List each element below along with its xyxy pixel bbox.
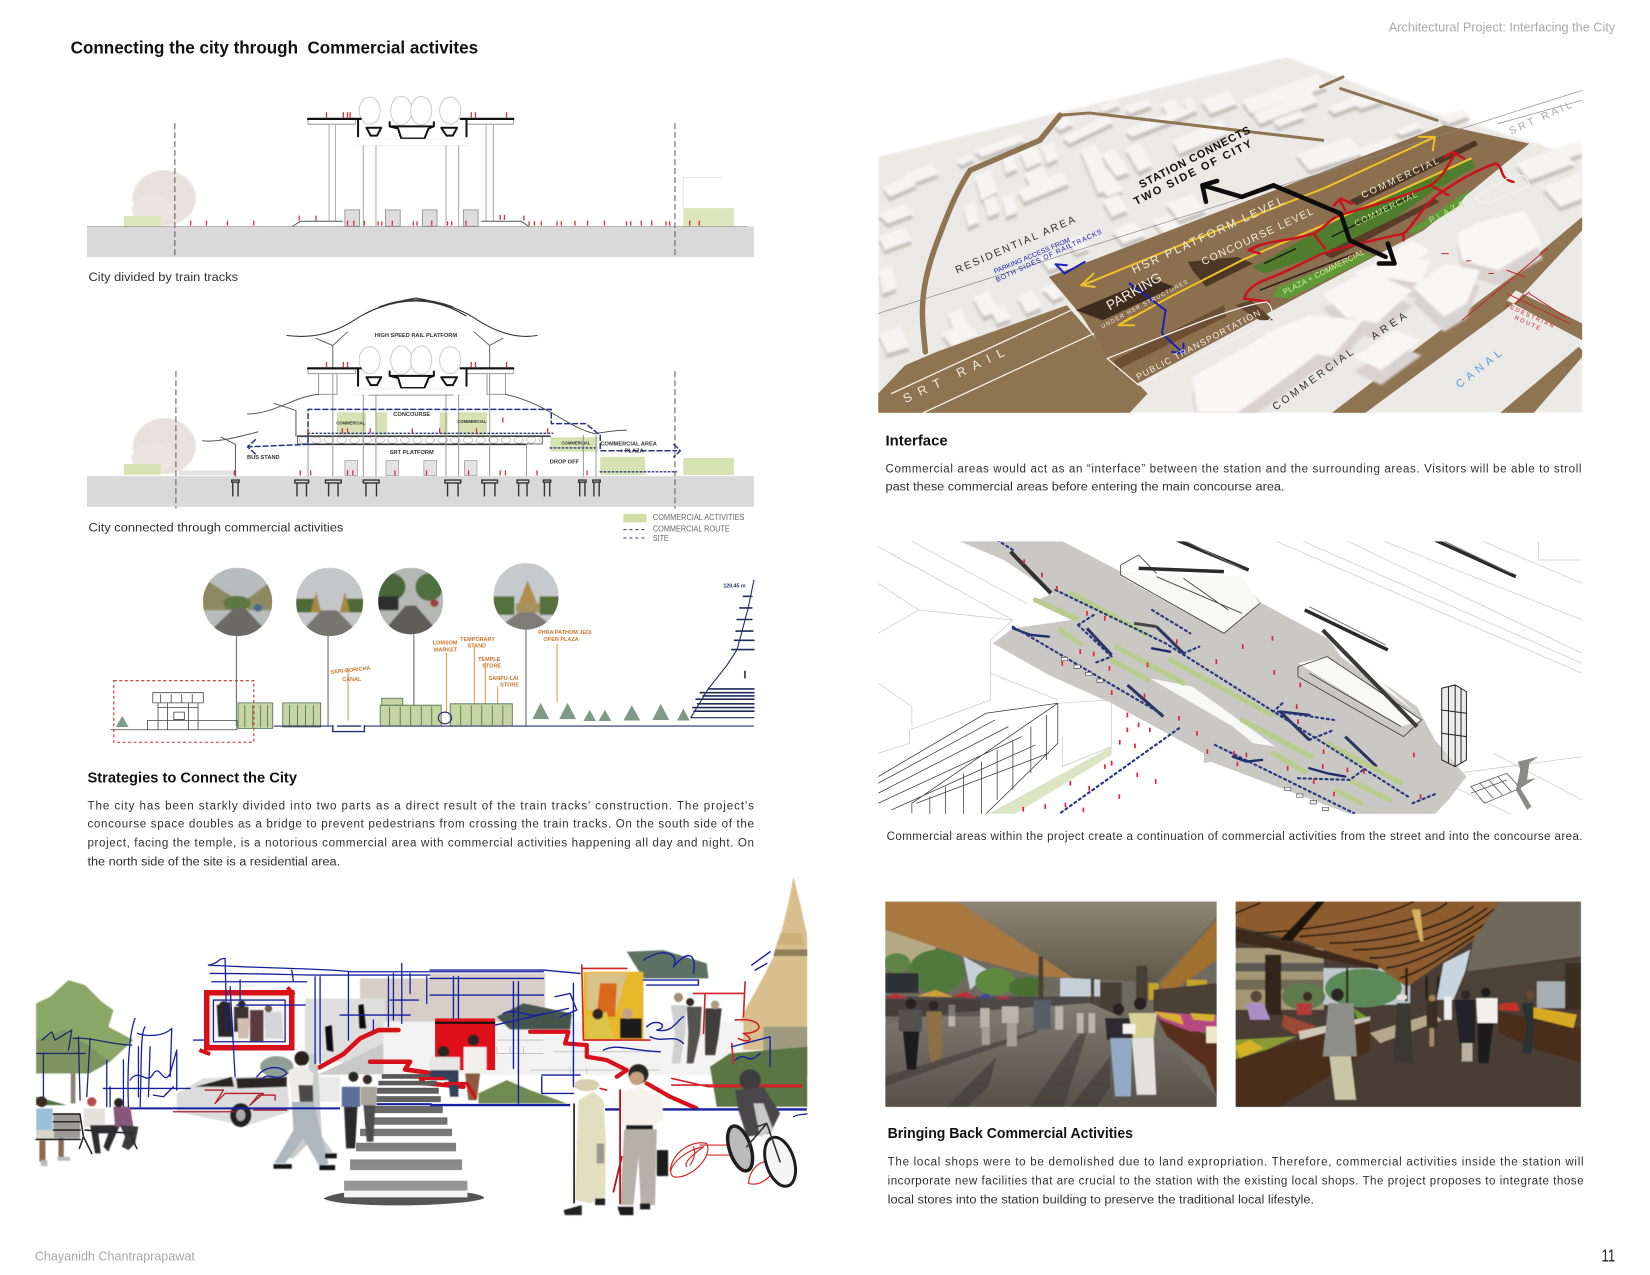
model photo with annotations (878, 57, 1582, 428)
sketch notes: CANAL (342, 677, 362, 683)
red bars on seated pair (420, 1078, 475, 1097)
section labels: COMMERCIAL (562, 440, 591, 445)
rail lines (878, 90, 1582, 314)
model annotations: PARKING ACCESS FROM (993, 237, 1072, 276)
pedestrians (191, 112, 699, 226)
red stairs upper (319, 1030, 463, 1087)
seated people on bench (36, 1096, 138, 1166)
urban street elevation with photo circles (111, 563, 754, 742)
location posts (236, 630, 526, 726)
section labels: + PLAZA (620, 449, 644, 455)
black arrow (1202, 181, 1395, 264)
model annotations: HSR PLATFORM LEVEL (1130, 195, 1287, 276)
model annotations: PLAZA (1427, 198, 1466, 225)
sketch notes (330, 583, 746, 688)
blue arrows (1056, 262, 1184, 354)
car scribble (173, 1090, 287, 1112)
text: interface (886, 464, 1581, 494)
section labels: HIGH SPEED RAIL PLATFORM (375, 333, 457, 339)
customer in grey jacket (1323, 1003, 1357, 1056)
model annotations: PEDESTRIAN (1504, 303, 1554, 330)
model annotations: AREA (1369, 310, 1409, 343)
model annotations: COMMERCIAL (1270, 346, 1356, 413)
photo circle 1 (203, 568, 273, 638)
text: bringing back (888, 1157, 1584, 1206)
red block (435, 1018, 495, 1070)
vendors (1246, 1003, 1270, 1020)
background (885, 901, 1217, 1107)
site boundary dashed (114, 681, 254, 742)
rail band (878, 305, 1148, 413)
model annotations: CANAL (1454, 348, 1504, 391)
title: Connecting the city through Commercial activites (71, 38, 478, 58)
distant figures (1426, 1001, 1437, 1028)
blue sketch lines (103, 958, 543, 1107)
residential blocks (878, 74, 1582, 358)
render: canopy market interior (1235, 901, 1581, 1107)
model annotations: CONCOURSE LEVEL (1200, 205, 1316, 268)
kiosk (1033, 1000, 1051, 1030)
heading: bringing back: Bringing Back Commercial Activities (888, 1126, 1133, 1142)
model annotations: SRT RAIL (901, 346, 1007, 406)
tree (36, 980, 133, 1105)
site model (878, 57, 1582, 428)
legend (623, 513, 744, 543)
text: interface: Commercial areas would act as an “interface” between the station and the surrounding areas. Visitors will be able to stroll (886, 464, 1581, 476)
model annotations: RESIDENTIAL AREA (954, 214, 1077, 276)
text: strategies (87, 801, 754, 868)
text: bringing back: incorporate new facilities that are crucial to the station with the existing local shops. The project proposes to integrate those (888, 1175, 1584, 1187)
tower (1442, 685, 1466, 767)
section labels: COMMERCIAL (457, 419, 487, 424)
sketch notes: TEMPORARY (460, 637, 495, 643)
model annotations: STATION CONNECTS (1137, 125, 1253, 191)
green commercial strips (1035, 593, 1401, 803)
sketch notes: SANPU-LAI (489, 676, 519, 682)
black silhouettes (325, 1004, 366, 1052)
red sketch (530, 1032, 697, 1108)
foreground left couple (899, 1010, 922, 1031)
mini station sketch (111, 693, 237, 730)
sketch notes: LOMSOM (433, 640, 458, 646)
right half of collage (418, 949, 808, 1216)
sketch notes: SERI-BORICHA (330, 666, 371, 676)
canal and ground line (333, 725, 364, 732)
white outlines (892, 175, 1529, 413)
umbrellas (885, 990, 1012, 999)
stairs (323, 1074, 484, 1205)
roads (922, 77, 1582, 413)
yellow circulation arrows (1081, 137, 1471, 325)
walking men (273, 1051, 337, 1170)
lit floor (1370, 1013, 1442, 1043)
woman in cream dress (563, 1079, 606, 1215)
text: strategies: concourse space doubles as a bridge to prevent pedestrians from crossing the train tracks. On the south side of the (87, 819, 754, 831)
text: bringing back: local stores into the station building to preserve the traditional local lifestyle. (888, 1194, 1314, 1206)
green commercial blocks (238, 698, 512, 728)
columns (1038, 956, 1147, 1016)
text: interface: past these commercial areas before entering the main concourse area. (886, 482, 1285, 494)
plants (478, 950, 807, 1107)
legend: COMMERCIAL ROUTE (653, 525, 730, 534)
plant behind car (260, 1056, 293, 1077)
car (177, 1075, 289, 1127)
spire red and blue tail (793, 1113, 807, 1117)
site dashed lines (176, 371, 675, 509)
blue sketch lines left (37, 1030, 132, 1100)
voids (1121, 572, 1422, 747)
cyclist (723, 1069, 801, 1190)
site dashed lines (175, 123, 675, 257)
tree (132, 418, 196, 474)
sketch notes: TEMPLE (478, 657, 501, 663)
station platform (1049, 125, 1529, 385)
back buildings and trees (1235, 948, 1324, 1010)
wall sketches (305, 978, 743, 1102)
sketch notes: STAND (468, 644, 486, 650)
sketch notes: OPEN PLAZA (543, 637, 579, 643)
caption: connected: City connected through commercial activities (89, 523, 344, 535)
back wall marks (497, 1040, 660, 1073)
left counter (1235, 1020, 1370, 1107)
section labels (247, 333, 657, 465)
model annotations: UNDER HSR STRUCTURES (1101, 279, 1189, 330)
right counter (1498, 1011, 1581, 1062)
legend: SITE (653, 534, 669, 543)
floor (1235, 901, 1581, 1107)
commercial route dotted (997, 540, 1437, 813)
legend: COMMERCIAL ACTIVITIES (653, 513, 744, 522)
seated pair (430, 1035, 487, 1100)
tree (132, 170, 196, 226)
model annotations: TWO SIDE OF CITY (1132, 138, 1254, 208)
collage: street life at the station (36, 870, 827, 1230)
photo circle 2 (296, 568, 363, 638)
red frame and diners (199, 987, 294, 1054)
text: strategies: The city has been starkly divided into two parts as a direct result of the train tracks' construction. The project's (87, 801, 754, 813)
text: bringing back: The local shops were to be demolished due to land expropriation. Therefore, commercial activities inside the station will (888, 1157, 1584, 1169)
deck and troughs (308, 346, 513, 395)
side roofs (203, 394, 627, 476)
roof (287, 298, 537, 336)
render: market under station canopy (884, 901, 1217, 1107)
photo circle 3 (376, 568, 443, 638)
caption: commercial areas: Commercial areas within the project create a continuation of commercial activities from the street and into the concourse area. (887, 831, 1583, 843)
walking pair (1454, 1000, 1475, 1043)
page number: 11 (1601, 1245, 1615, 1265)
photo circle 4 (493, 563, 559, 632)
caption: divided: City divided by train tracks (89, 272, 238, 284)
ground band (87, 227, 754, 257)
trees (116, 703, 690, 727)
chedi sketch (691, 580, 754, 718)
facade block (878, 703, 1058, 814)
escalators and structures (1011, 540, 1516, 777)
standing group (671, 993, 722, 1063)
base line right (430, 1105, 807, 1109)
blue sketch lines (430, 952, 770, 1103)
section labels: BUS STAND (247, 455, 280, 461)
green commercial blocks (124, 208, 734, 227)
market stalls (1157, 1016, 1217, 1096)
right ceiling and wall (1467, 901, 1581, 971)
section: city divided by train tracks (87, 96, 754, 257)
green commercial zones (124, 412, 734, 475)
model annotations: PUBLIC TRANSPORTATION (1134, 308, 1262, 382)
footings (232, 480, 600, 496)
pedestrian red arrows (1442, 249, 1570, 324)
chedi (735, 877, 807, 1077)
base line left (130, 1104, 432, 1108)
concourse floor (957, 540, 1466, 814)
orange markers (348, 644, 557, 720)
isometric drawing of concourse (878, 540, 1582, 817)
heading: interface: Interface (886, 433, 948, 449)
running header: Architectural Project: Interfacing the City (1389, 21, 1616, 35)
model annotations: TRANSIT (1480, 179, 1520, 204)
section labels: COMMERCIAL AREA (600, 441, 657, 447)
text: strategies: the north side of the site is a residential area. (87, 856, 340, 868)
dress edge line (573, 1103, 575, 1203)
beams and columns (1235, 928, 1378, 970)
benches (1061, 657, 1329, 811)
shadows (885, 1030, 1110, 1107)
station strips (1076, 140, 1478, 370)
text: strategies: project, facing the temple, is a notorious commercial area with commercial activities happening all day and night. On (87, 837, 754, 849)
base (878, 57, 1582, 413)
commercial route dashed (248, 409, 680, 457)
ceiling (957, 901, 1217, 982)
cover right edge (807, 870, 827, 1230)
model annotations: COMMERCIAL (1360, 156, 1441, 201)
pink panel (429, 973, 546, 1008)
bench frame (36, 1114, 137, 1153)
pedestrians (234, 362, 587, 475)
yellow poster (583, 972, 643, 1040)
model annotations: SRT RAIL (1507, 99, 1574, 138)
section labels: CONCOURSE (393, 412, 430, 418)
sketch notes: PHRA PATHOM JEDI (538, 630, 592, 636)
sketch notes: MARKET (434, 648, 458, 654)
ground band (87, 476, 754, 507)
background crowd (949, 1005, 1095, 1033)
concourse floor and truss (179, 374, 596, 476)
red scribbles (670, 1143, 777, 1184)
commercial blocks (1192, 210, 1543, 428)
author: Chayanidh Chantraprapawat (35, 1249, 195, 1263)
sketch notes: STORE (500, 682, 519, 688)
elevated structure (87, 96, 748, 227)
model annotations: BOTH SIDES OF RAILTRACKS (995, 229, 1103, 284)
paving (885, 1003, 1217, 1107)
model annotations: COMMERCIAL (1353, 189, 1419, 228)
section labels: SRT PLATFORM (390, 450, 434, 456)
red circulation arrows (1244, 152, 1514, 302)
sketch notes: STORE (482, 664, 501, 670)
man with briefcase (617, 1064, 668, 1215)
upper structures (1121, 555, 1422, 737)
linework background (878, 540, 1582, 817)
section labels: DROP OFF (550, 459, 580, 465)
plan details (1471, 773, 1520, 803)
man edge line and red stroke (613, 1090, 622, 1203)
model annotations (901, 99, 1574, 413)
heading: strategies: Strategies to Connect the City (87, 770, 298, 786)
foreground couple (1105, 1018, 1132, 1040)
pedestrians (1023, 559, 1421, 812)
couple on stairs (342, 1072, 377, 1148)
section: city connected through commercial activities (87, 298, 754, 509)
canopy (1235, 901, 1500, 987)
section labels: COMMERCIAL (336, 420, 366, 425)
model annotations: ROUTE (1513, 315, 1541, 332)
model annotations: PLAZA + COMMERCIAL (1281, 247, 1367, 297)
visitor in dark skirt (1393, 1003, 1413, 1063)
model annotations: PARKING (1104, 270, 1164, 313)
sketch notes: 120.45 m (723, 583, 746, 589)
